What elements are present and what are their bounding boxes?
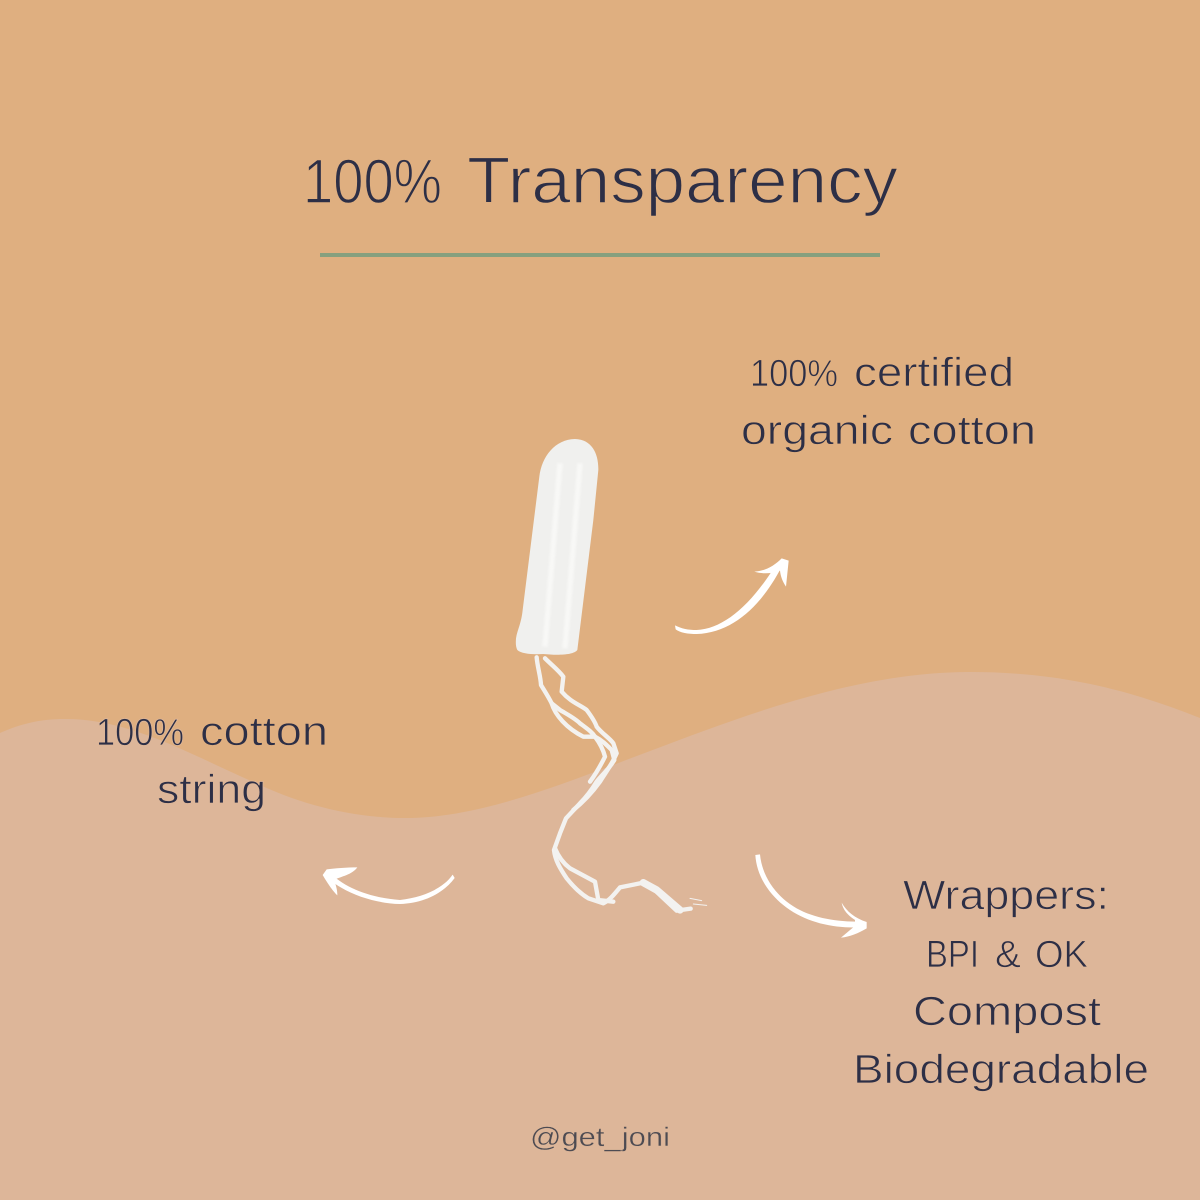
label: cotton string: 100% xyxy=(96,712,184,754)
title: 100% xyxy=(303,147,442,217)
label: cotton string: cotton xyxy=(200,708,328,754)
label: organic cotton xyxy=(741,349,1036,453)
tampon illustration xyxy=(516,439,707,911)
tampon string xyxy=(537,657,707,911)
label: wrappers: Compost xyxy=(913,988,1102,1034)
handle credit: @get_joni xyxy=(530,1122,670,1152)
label: wrappers: Wrappers: xyxy=(903,872,1109,918)
label: cotton string: string xyxy=(157,766,266,812)
background wave xyxy=(0,672,1200,1200)
arrow: to cotton string xyxy=(323,867,455,904)
label: organic cotton: cotton xyxy=(908,407,1036,453)
label: wrappers: BPI xyxy=(926,934,979,976)
title: Transparency xyxy=(467,143,898,217)
label: organic cotton: organic xyxy=(741,407,893,453)
title xyxy=(303,143,898,217)
title divider xyxy=(320,253,880,257)
label: organic cotton: 100% xyxy=(750,353,838,395)
label: organic cotton: certified xyxy=(854,349,1014,395)
arrow: to organic cotton xyxy=(675,558,789,634)
label: wrappers xyxy=(853,872,1149,1092)
label: wrappers: Biodegradable xyxy=(853,1046,1149,1092)
label: cotton string xyxy=(96,708,328,812)
arrow: to wrappers xyxy=(755,854,867,938)
label: wrappers: OK xyxy=(1035,934,1088,976)
label: wrappers: & xyxy=(995,934,1021,976)
tampon body xyxy=(516,439,598,655)
